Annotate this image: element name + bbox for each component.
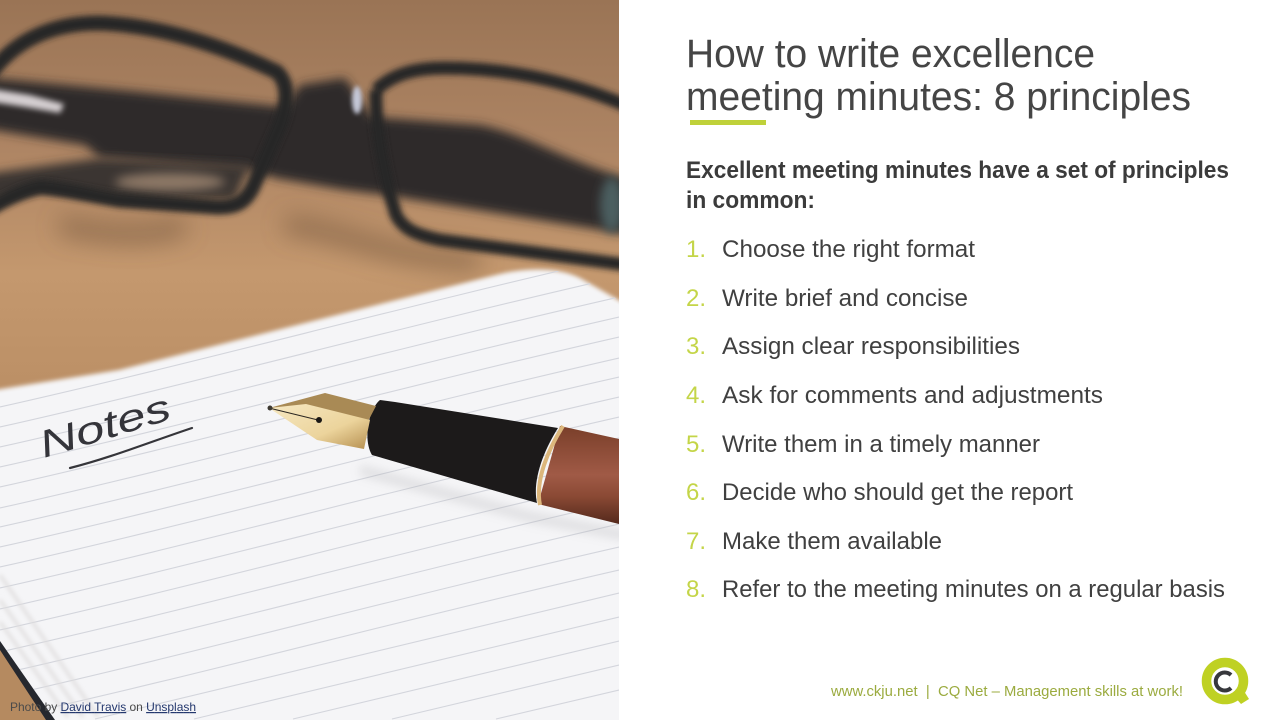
item 4: 4.: [686, 382, 706, 409]
intro line 1: Excellent meeting minutes have a set of principles: [686, 157, 1229, 184]
footer tagline: www.ckju.net | CQ Net – Management skills at work!: [830, 683, 1183, 700]
black grip: [367, 400, 558, 503]
ruled lines: [0, 257, 619, 719]
glasses temple and lens dark band: [0, 76, 650, 238]
nib breather hole: [316, 417, 322, 423]
intro line 2: in common:: [686, 187, 815, 214]
title: [686, 32, 1191, 119]
pen shadow: [360, 466, 619, 540]
lower left lens: [0, 158, 250, 210]
notebook dark edge and cover: [0, 641, 55, 720]
desk corner: [0, 650, 2, 654]
item 5: Write them in a timely manner: [722, 431, 1040, 458]
bridge glint: [352, 86, 362, 114]
title line 2: meeting minutes: 8 principles: [686, 75, 1191, 119]
item 1: 1.: [686, 236, 706, 263]
item 7: Make them available: [722, 528, 942, 555]
teal lens reflection: [600, 177, 624, 233]
left temple glint: [0, 87, 64, 113]
glasses shadow on desk: [60, 225, 480, 262]
gold band: [539, 426, 563, 505]
notebook: [0, 257, 650, 720]
fountain pen: [268, 393, 619, 540]
item 7: 7.: [686, 528, 706, 555]
photo: notebook, pen and glasses on a desk: [0, 0, 650, 720]
item 6: Decide who should get the report: [722, 479, 1073, 506]
item 2: Write brief and concise: [722, 285, 968, 312]
nib upper face: [272, 393, 376, 420]
item 1: Choose the right format: [722, 236, 975, 263]
item 5: 5.: [686, 431, 706, 458]
left lens rim: [0, 23, 286, 215]
item 2: 2.: [686, 285, 706, 312]
intro text: [686, 157, 1229, 214]
handwriting underline: [70, 428, 192, 468]
notebook page body: [2, 644, 619, 720]
logo tail: [1233, 688, 1249, 704]
handwritten Notes: [44, 401, 194, 470]
logo letter C: [1216, 672, 1231, 690]
right lens rim: [376, 68, 650, 268]
numbered list of 8 principles: [686, 236, 1225, 603]
handwriting text: Notes: [34, 387, 176, 467]
wooden desk background: [0, 0, 619, 392]
nib lower face: [269, 404, 370, 449]
page stack edge: [0, 575, 98, 717]
item 8: 8.: [686, 576, 706, 603]
copper barrel: [538, 426, 619, 524]
item 4: Ask for comments and adjustments: [722, 382, 1103, 409]
item 3: 3.: [686, 333, 706, 360]
blurred glasses: [0, 23, 650, 268]
photo credit: Photo by David Travis on Unsplash: [10, 700, 196, 714]
title line 1: How to write excellence: [686, 32, 1095, 76]
item 3: Assign clear responsibilities: [722, 333, 1020, 360]
item 6: 6.: [686, 479, 706, 506]
notebook page soft edge: [0, 266, 619, 394]
icon: CQ logo: [1206, 662, 1249, 704]
item 8: Refer to the meeting minutes on a regular basis: [722, 576, 1225, 603]
title accent bar: [690, 120, 766, 125]
nib slit: [269, 408, 318, 420]
nib tip: [268, 406, 272, 410]
lens reflection highlight: [115, 173, 225, 191]
logo ring: [1206, 662, 1244, 700]
